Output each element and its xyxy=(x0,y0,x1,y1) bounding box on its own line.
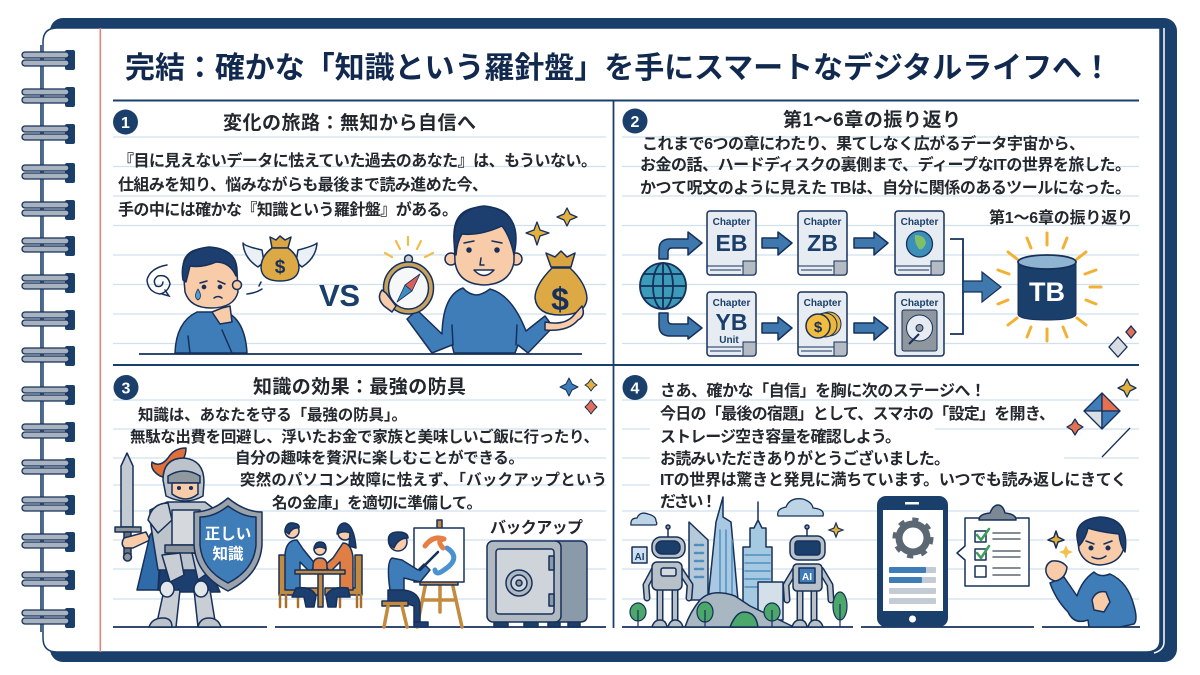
chapter card YB: Unit xyxy=(719,335,739,346)
body text 4: 今日の「最後の宿題」として、スマホの「設定」を開き、 xyxy=(660,404,1055,423)
panel 1: journey of change xyxy=(113,110,597,353)
panel 2: review of chapters 1-6 xyxy=(622,108,1136,357)
body text 2: お金の話、ハードディスクの裏側まで、ディープなITの世界を旅した。 xyxy=(640,155,1131,174)
chapter card ZB: Chapter xyxy=(804,217,841,228)
icon: smartphone with settings xyxy=(877,496,948,627)
spiral binding rings xyxy=(22,45,75,632)
body text 3: 突然のパソコン故障に怯えず、「バックアップという xyxy=(240,470,607,489)
number badge 2 xyxy=(622,108,648,134)
number badge 1 xyxy=(113,110,138,134)
icon: determined person xyxy=(1046,517,1136,627)
icon: trees and sparkle xyxy=(630,523,847,627)
VS label: VS xyxy=(319,278,360,313)
icon: robot left xyxy=(632,525,690,627)
decoration: diamonds xyxy=(1109,326,1136,357)
chapter card hard disk xyxy=(895,292,944,356)
heading 1: 変化の旅路：無知から自信へ xyxy=(223,112,476,134)
chapter card EB: EB xyxy=(716,230,747,256)
body text 4: ストレージ空き容量を確認しよう。 xyxy=(660,427,901,446)
body text 4: お読みいただきありがとうございました。 xyxy=(660,449,950,468)
body text 2 xyxy=(640,134,1131,197)
icon: money bag with wings: $ xyxy=(275,257,286,278)
decoration: sparkles 3 xyxy=(560,378,597,414)
icon: TB database with rays xyxy=(998,233,1101,341)
icon: city skyline xyxy=(685,497,794,627)
label: backup: バックアップ xyxy=(490,519,583,537)
icon: checklist clipboard xyxy=(957,505,1029,586)
chapter card YB: YB xyxy=(716,309,747,335)
body text 4: ださい！ xyxy=(660,493,717,511)
icon: big money bag: $ xyxy=(551,281,569,317)
panel 3: the effect of knowledge xyxy=(114,375,607,627)
icon: robot right: AI xyxy=(802,572,812,583)
bracket and arrow to TB xyxy=(950,239,1001,334)
flow arrows xyxy=(659,232,888,340)
number badge 2: 2 xyxy=(631,114,640,131)
icon: globe xyxy=(640,263,686,309)
icon: knight with shield: 正しい xyxy=(205,525,251,543)
icon: worried person xyxy=(175,247,247,353)
chapter card coins xyxy=(798,292,847,356)
chapter card hard disk: Chapter xyxy=(901,298,938,309)
sparkles 1 xyxy=(526,208,577,245)
body text 4: さあ、確かな「自信」を胸に次のステージへ！ xyxy=(660,381,986,400)
heading 3: 知識の効果：最強の防具 xyxy=(253,375,466,398)
body text 3: 名の金庫」を適切に準備して。 xyxy=(272,493,482,512)
number badge 4 xyxy=(622,375,648,400)
panel 4: to the next stage xyxy=(622,375,1136,627)
body text 1: 仕組みを知り、悩みながらも最後まで読み進めた今、 xyxy=(118,175,488,194)
chapter card coins: $ xyxy=(814,319,823,336)
body text 3: 無駄な出費を回避し、浮いたお金で家族と美味しいご飯に行ったり、 xyxy=(130,427,599,446)
body text 3: 自分の趣味を贅沢に楽しむことができる。 xyxy=(235,448,524,467)
chapter card EB: Chapter xyxy=(713,217,750,228)
body text 3: 知識は、あなたを守る「最強の防具」。 xyxy=(138,405,407,424)
icon: knight with shield: 知識 xyxy=(212,544,244,563)
chapter card coins: Chapter xyxy=(804,298,841,309)
number badge 3 xyxy=(114,375,138,400)
decoration: kite and sparkles xyxy=(1067,379,1136,457)
label: chapters review: 第1〜6章の振り返り xyxy=(989,208,1133,227)
body text 2: これまで6つの章にわたり、果てしなく広がるデータ宇宙から、 xyxy=(642,134,1085,153)
icon: clouds xyxy=(631,499,823,525)
heading 2: 第1〜6章の振り返り xyxy=(783,109,961,131)
icon: knight with shield xyxy=(115,448,262,627)
number badge 3: 3 xyxy=(122,380,131,398)
number badge 1: 1 xyxy=(121,115,130,132)
icon: confident person xyxy=(407,206,553,353)
title: 完結：確かな「知識という羅針盤」を手にスマートなデジタルライフへ！ xyxy=(125,51,1112,85)
chapter card ZB: ZB xyxy=(807,230,838,256)
body text 4: ITの世界は驚きと発見に満ちています。いつでも読み返しにきてく xyxy=(660,471,1127,489)
icon: compass xyxy=(379,237,434,314)
icon: robot right xyxy=(786,525,831,627)
chapter card EB xyxy=(707,211,756,275)
icon: painter at easel xyxy=(382,520,464,627)
chapter card YB xyxy=(707,292,756,356)
body text 1: 手の中には確かな『知識という羅針盤』がある。 xyxy=(118,200,458,219)
icon: worry swirl xyxy=(147,265,170,296)
body text 2: かつて呪文のように見えた TBは、自分に関係のあるツールになった。 xyxy=(640,178,1131,197)
chapter card earth xyxy=(895,211,944,275)
icon: money bag with wings xyxy=(243,236,317,294)
icon: safe xyxy=(487,541,587,627)
icon: family meal xyxy=(279,523,362,607)
body text 1 xyxy=(118,151,597,219)
chapter card earth: Chapter xyxy=(901,217,938,228)
chapter card YB: Chapter xyxy=(713,298,750,309)
icon: robot left: AI xyxy=(634,552,645,563)
body text 1: 『目に見えないデータに怯えていた過去のあなた』は、もういない。 xyxy=(118,151,597,170)
body text 4 xyxy=(660,381,1127,511)
number badge 4: 4 xyxy=(631,380,640,398)
icon: big money bag xyxy=(535,251,587,330)
chapter card ZB xyxy=(798,211,847,275)
body text 3 xyxy=(130,405,607,512)
icon: TB database with rays: TB xyxy=(1029,277,1065,307)
